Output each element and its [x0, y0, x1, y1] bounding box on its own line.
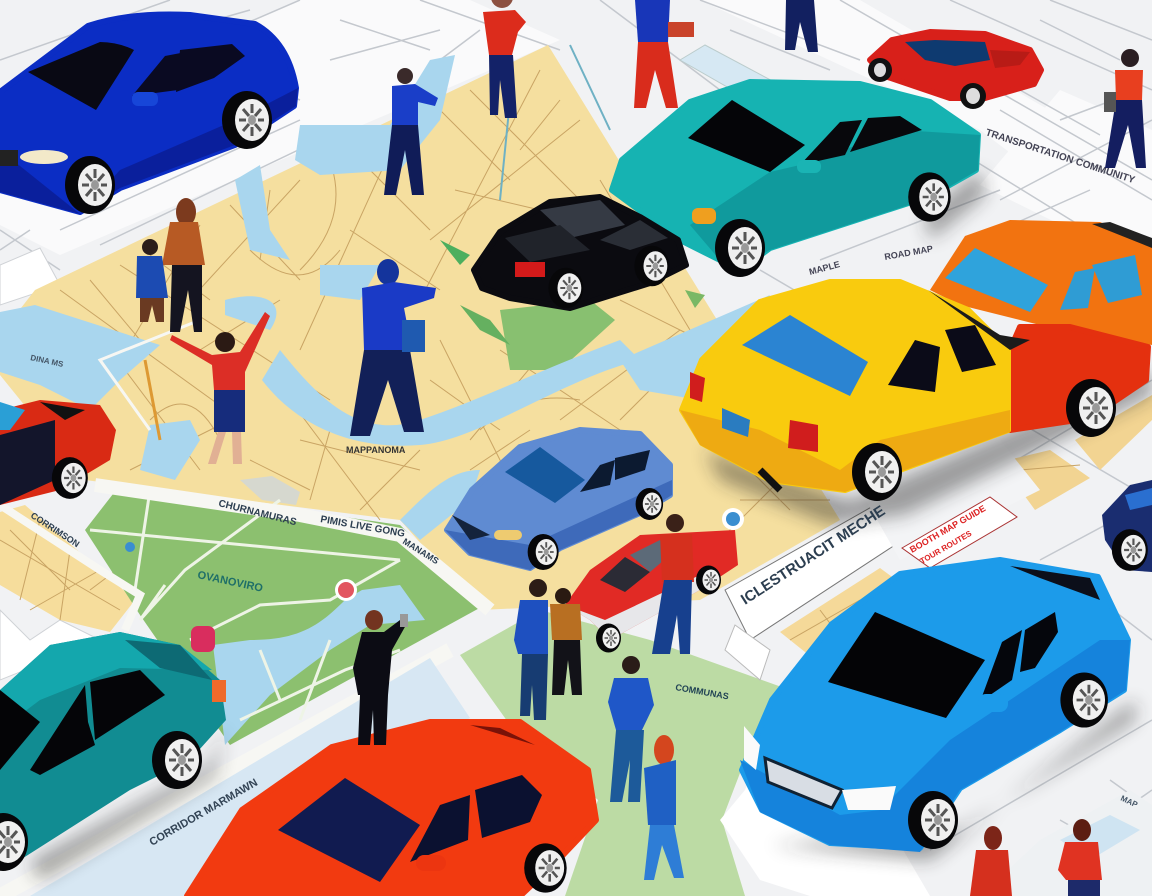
car shadows — [30, 170, 1152, 880]
person: woman with orange hair — [644, 735, 684, 880]
map labels: CORRIMSON — [29, 510, 81, 549]
map labels: CORRIDOR MARMAWN — [148, 777, 260, 849]
map labels: MAPLE — [808, 259, 841, 277]
map: green park — [85, 240, 790, 896]
car: teal sedan bottom left — [0, 632, 226, 871]
road: light blue street — [30, 658, 470, 896]
map labels: BOOTH MAP GUIDE — [908, 503, 987, 555]
person: blue shirt red trousers — [634, 0, 694, 108]
map labels: TOUR ROUTES — [918, 529, 974, 566]
map labels: OVANOVIRO — [196, 569, 264, 595]
car: blue sedan top left — [0, 14, 298, 214]
map labels: CHURNAMURAS — [217, 498, 298, 528]
map pins — [125, 508, 744, 652]
car: black sports car — [474, 197, 686, 308]
person: orange shirt in group — [550, 588, 582, 695]
map labels: DINA MS — [30, 353, 65, 369]
car: red pickup toy — [565, 530, 738, 652]
map labels — [29, 127, 1140, 849]
map labels: ROAD MAP — [884, 244, 934, 262]
person: woman in red with raised arms — [170, 312, 270, 464]
roads on the map — [0, 45, 610, 896]
car: big blue sedan — [740, 560, 1130, 852]
map labels: MAPPANOMA — [346, 445, 406, 455]
person: right top red shirt — [1104, 49, 1146, 168]
road: white label bands — [720, 440, 1040, 896]
person: blue shirt on map top — [384, 68, 438, 195]
person: bottom red figure one — [970, 826, 1012, 896]
person: child in blue — [136, 239, 168, 322]
car: small red car top right — [868, 32, 1041, 109]
car: navy car right edge — [1102, 480, 1152, 572]
person: bottom red figure two — [1058, 819, 1102, 896]
map labels: MANAMS — [401, 536, 441, 566]
car: teal sedan centre — [612, 82, 980, 277]
person: woman in brown — [162, 198, 205, 332]
car: red car left edge — [0, 400, 116, 505]
person: red shirt top centre — [483, 0, 526, 118]
park paths — [90, 490, 400, 720]
map labels: ICLESTRUACIT MECHE — [738, 502, 888, 608]
person: blue shirt in group — [514, 579, 548, 720]
map labels: PIMIS LIVE GONG — [319, 514, 406, 540]
map labels: MAP — [1119, 794, 1140, 810]
person: man in black with phone — [353, 610, 408, 745]
person: navy top — [785, 0, 818, 52]
person: red shirt near pickup — [652, 514, 694, 654]
person: blue shirt lower centre — [608, 656, 654, 802]
car: orange car right — [930, 220, 1152, 345]
map labels: TRANSPORTATION COMMUNITY — [984, 127, 1136, 186]
map: tan city area — [0, 45, 1152, 660]
car: red sedan bottom — [187, 722, 596, 896]
person: large figure in blue — [350, 259, 436, 436]
car: blue grey sedan centre — [445, 430, 672, 570]
map labels: COMMUNAS — [675, 682, 730, 701]
map: rivers and lakes — [0, 55, 770, 745]
car: yellow and red taxi — [680, 282, 1148, 501]
